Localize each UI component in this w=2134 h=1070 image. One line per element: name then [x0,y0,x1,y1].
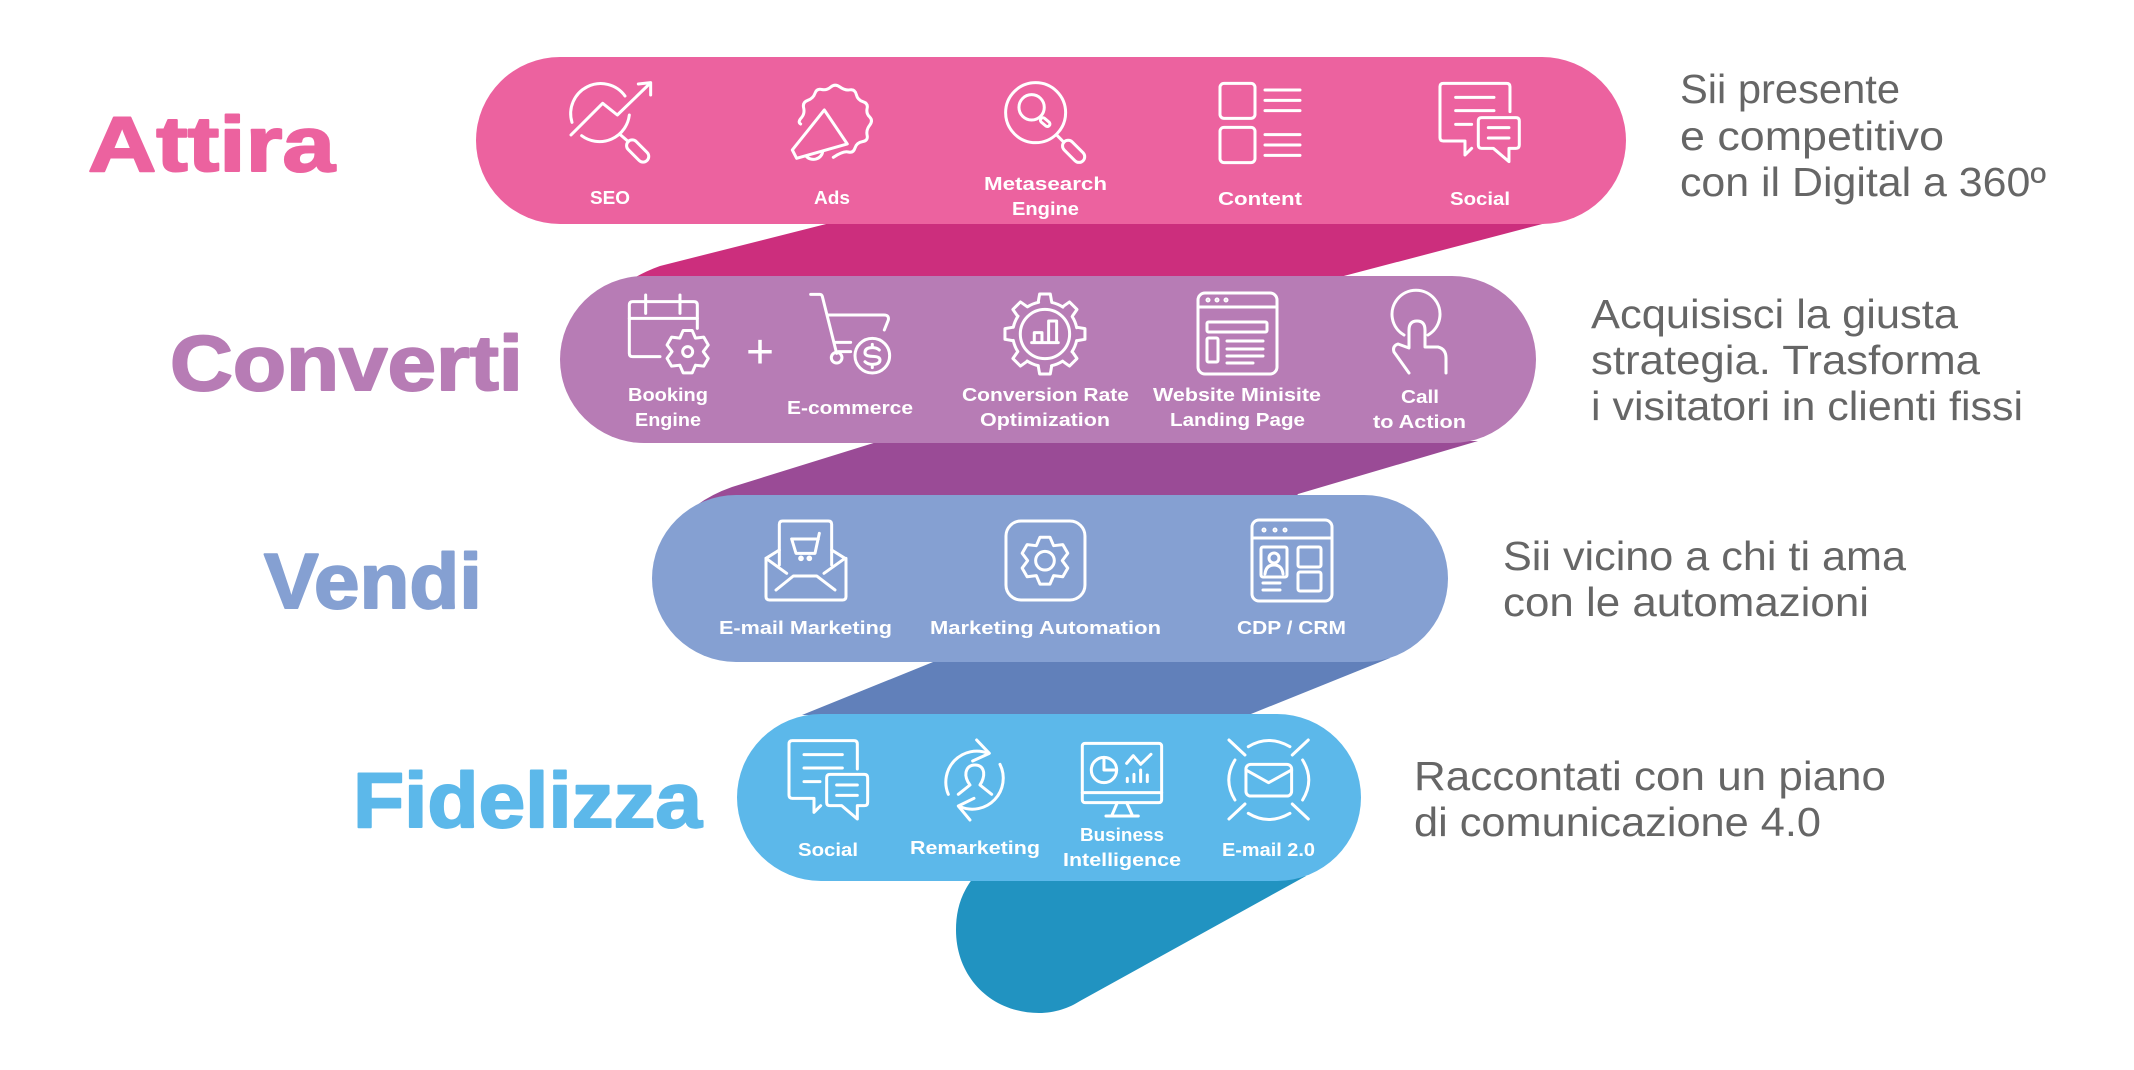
icon: Booking Engine [629,295,708,373]
text block: Attira description: con il Digital a 360º [1680,159,2046,205]
icon: SEO [571,83,651,164]
label: to Action: to Action [1373,412,1466,432]
plus sign: + [746,326,774,379]
label: SEO: SEO [590,188,630,208]
label: Call: Call [1401,387,1439,407]
text block: Converti description: i visitatori in clienti fissi [1591,383,2023,429]
text block: Converti description [1591,291,2023,429]
icon: Remarketing [946,740,1003,820]
panel: Attira [476,57,1626,224]
icon: Content [1220,83,1300,163]
label: Remarketing: Remarketing [910,838,1040,858]
text block: Converti description: strategia. Trasforma [1591,337,1980,383]
icon: E-commerce [811,294,890,373]
icon: Website Minisite Landing Page [1198,293,1277,374]
label: Metasearch: Metasearch [984,174,1107,194]
label: Business: Business [1080,825,1164,845]
icon: Marketing Automation [1006,521,1085,600]
heading: Fidelizza: Fidelizza [353,756,703,844]
heading: Vendi: Vendi [264,537,482,625]
connector: Attira to Converti [634,222,1550,285]
label: Marketing Automation: Marketing Automation [930,618,1161,638]
label: Engine: Engine [635,410,701,430]
icon: E-mail Marketing [766,521,846,600]
icon: Business Intelligence [1082,743,1162,816]
label: Intelligence: Intelligence [1063,850,1181,870]
connector: Vendi to Fidelizza [802,658,1390,716]
panel: Vendi [652,495,1448,662]
label: Engine: Engine [1012,199,1079,219]
label: Optimization: Optimization [980,410,1110,430]
label: Social: Social [798,840,858,860]
text block: Attira description: e competitivo [1680,113,1944,159]
label: E-commerce: E-commerce [787,398,913,418]
label: Content: Content [1218,189,1302,209]
heading: Attira: Attira [88,100,336,188]
panel: Converti [560,276,1536,443]
text block: Vendi description [1503,533,1906,625]
icon: Metasearch Engine [1006,83,1087,165]
text block: Fidelizza description: di comunicazione 4.0 [1414,799,1821,845]
connector: Converti to Vendi [697,441,1478,506]
label: Conversion Rate: Conversion Rate [962,385,1129,405]
label: Social: Social [1450,189,1510,209]
text block: Vendi description: con le automazioni [1503,579,1869,625]
text block: Fidelizza description: Raccontati con un piano [1414,753,1886,799]
icon: Social [1440,83,1519,162]
heading: Converti: Converti [170,319,523,407]
text block: Attira description [1680,66,2046,205]
text block: Converti description: Acquisisci la giusta [1591,291,1958,337]
panel: Fidelizza [737,714,1361,881]
icon: CDP / CRM [1252,520,1332,601]
icon: Conversion Rate Optimization [1005,294,1085,374]
icon: Ads [792,85,871,159]
label: E-mail 2.0: E-mail 2.0 [1222,840,1315,860]
text block: Attira description: Sii presente [1680,66,1900,112]
connector: funnel tail [956,876,1306,1013]
label: Website Minisite: Website Minisite [1153,385,1321,405]
label: E-mail Marketing: E-mail Marketing [719,618,892,638]
label: Landing Page: Landing Page [1170,410,1305,430]
text block: Fidelizza description [1414,753,1886,845]
icon: Social [789,741,868,819]
icon: Call to Action [1392,290,1446,373]
label: Ads: Ads [814,188,850,208]
label: CDP / CRM: CDP / CRM [1237,618,1346,638]
icon: E-mail 2.0 [1229,740,1309,819]
text block: Vendi description: Sii vicino a chi ti ama [1503,533,1906,579]
label: Booking: Booking [628,385,708,405]
